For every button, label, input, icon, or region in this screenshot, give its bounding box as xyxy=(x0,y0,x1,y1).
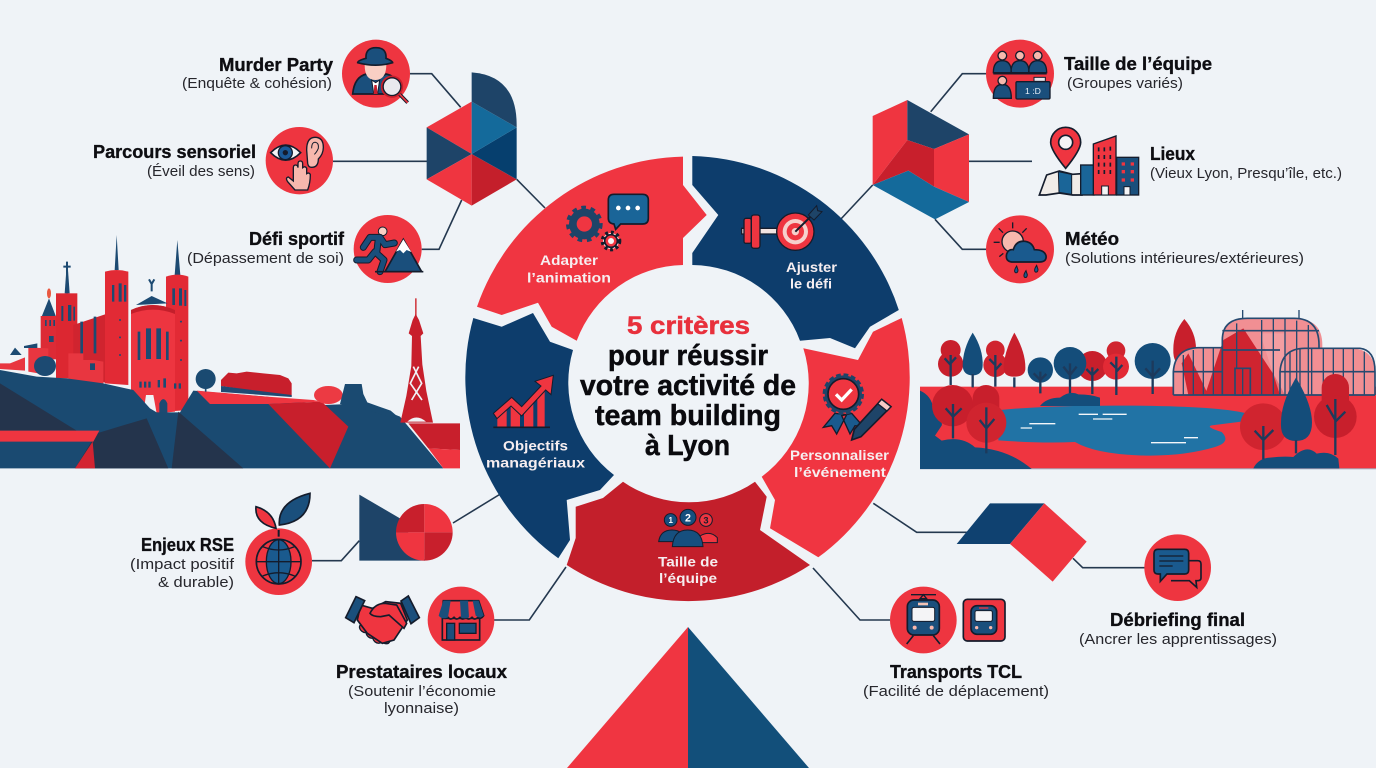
text: Défi sportif: Défi sportif xyxy=(249,229,345,249)
text: Transports TCL: Transports TCL xyxy=(890,662,1022,682)
label: Objectifs managériaux: Objectifs xyxy=(503,438,568,454)
text: Défi sportif xyxy=(187,229,345,267)
text: Enjeux RSE xyxy=(130,535,235,591)
label: Objectifs managériaux: managériaux xyxy=(486,454,585,470)
label: Ajuster le défi: le défi xyxy=(790,276,832,292)
label: Personnaliser l'événement: Personnaliser xyxy=(790,447,890,463)
icon: dumbbell and target xyxy=(742,206,822,250)
item: Enjeux RSE xyxy=(130,493,312,595)
text: Débriefing final xyxy=(1079,610,1277,648)
icon: gears and speech bubble xyxy=(569,194,648,249)
text: Lieux: Lieux xyxy=(1150,144,1195,164)
item: Taille de l'équipe xyxy=(986,40,1212,108)
text: Enjeux RSE: Enjeux RSE xyxy=(141,535,234,555)
central title xyxy=(580,312,796,462)
ground xyxy=(920,387,1376,469)
label: Personnaliser l'événement xyxy=(790,447,890,480)
basilica xyxy=(0,235,188,413)
segment: Ajuster le défi xyxy=(692,156,899,348)
cluster bottom left xyxy=(359,495,453,561)
icon: handshake xyxy=(346,596,419,645)
hexagon cluster top left xyxy=(427,72,517,206)
icon: detective xyxy=(342,40,410,108)
icon: three numbered people xyxy=(659,509,717,547)
icon: tram xyxy=(890,587,957,653)
text: Prestataires locaux: Prestataires locaux xyxy=(336,662,507,682)
item: Parcours sensoriel xyxy=(93,127,333,194)
hexagon cluster top right xyxy=(873,100,969,219)
text: Transports TCL xyxy=(863,662,1049,700)
label: Taille de l'équipe: l’équipe xyxy=(659,570,717,586)
text: Taille de l'équipe: Taille de l’équipe xyxy=(1064,54,1212,74)
label: Adapter l'animation xyxy=(527,252,611,286)
central title: 5 critères xyxy=(627,312,750,340)
icon: three numbered people: 2 xyxy=(685,512,691,524)
label: Taille de l'équipe xyxy=(658,554,718,586)
label: Objectifs managériaux xyxy=(486,438,585,470)
icon: badge and pencil xyxy=(823,375,891,440)
label: Ajuster le défi: Ajuster xyxy=(786,259,838,275)
text: Lieux xyxy=(1150,144,1342,182)
label: Ajuster le défi xyxy=(786,259,838,292)
back row trees xyxy=(938,319,1196,395)
text: Parcours sensoriel xyxy=(93,142,256,180)
segment: Taille de l'équipe xyxy=(567,482,810,601)
icon: eye, ear and hand xyxy=(266,127,333,194)
icon: globe and leaves xyxy=(245,493,312,595)
icon: speech bubbles xyxy=(1144,534,1211,601)
text: Prestataires locaux: (Soutenir l’économie xyxy=(348,683,496,700)
segment: Personnaliser l'événement xyxy=(762,318,910,557)
right illustration: Parc de la Tête d'Or xyxy=(920,310,1376,469)
label: Adapter l'animation: l’animation xyxy=(527,270,611,286)
item: Débriefing final xyxy=(1079,534,1277,648)
text: Débriefing final: Débriefing final xyxy=(1110,610,1245,630)
text: Transports TCL: (Facilité de déplacement) xyxy=(863,683,1049,700)
item: Transports TCL xyxy=(863,587,1049,700)
central title: team building xyxy=(595,400,781,432)
central ring xyxy=(465,156,910,601)
connector lines xyxy=(312,74,1146,620)
item: Défi sportif xyxy=(187,215,423,283)
item: Lieux xyxy=(1039,127,1342,195)
lake xyxy=(998,406,1246,456)
text: Parcours sensoriel: (Éveil des sens) xyxy=(147,163,255,180)
icon: three numbered people: 3 xyxy=(703,516,709,526)
bottom decorative triangle xyxy=(567,627,809,768)
icon: local shop xyxy=(428,587,494,653)
label: Taille de l'équipe: Taille de xyxy=(658,554,718,570)
central title: votre activité de xyxy=(580,370,796,402)
greenhouse xyxy=(1173,310,1375,395)
left illustration: Fourvière skyline of Lyon xyxy=(0,235,460,468)
label: Personnaliser l'événement: l’événement xyxy=(794,464,886,480)
icon: metro sign xyxy=(963,599,1005,641)
central title: à Lyon xyxy=(645,430,730,462)
text: Parcours sensoriel: Parcours sensoriel xyxy=(93,142,256,162)
text: Défi sportif: (Dépassement de soi) xyxy=(187,250,344,267)
text: Taille de l'équipe xyxy=(1064,54,1212,92)
text: Murder Party xyxy=(182,55,333,92)
text: Enjeux RSE: (Impact positif xyxy=(130,556,235,573)
text: Taille de l'équipe: (Groupes variés) xyxy=(1067,75,1183,92)
label: Adapter l'animation: Adapter xyxy=(540,252,599,268)
icon: runner and mountain xyxy=(354,215,423,283)
item: Météo xyxy=(986,215,1304,283)
central title: pour réussir xyxy=(608,340,768,372)
segment: Objectifs managériaux xyxy=(465,313,614,558)
text: Enjeux RSE: & durable) xyxy=(158,574,234,591)
text: Prestataires locaux xyxy=(336,662,507,717)
item: Prestataires locaux xyxy=(336,587,507,717)
icon: sun, cloud and rain xyxy=(986,215,1054,283)
text: Murder Party: (Enquête & cohésion) xyxy=(182,75,332,92)
text: Débriefing final: (Ancrer les apprentissages) xyxy=(1079,631,1277,648)
icon: growth chart xyxy=(493,375,553,427)
text: Météo: Météo xyxy=(1065,229,1119,249)
text: Prestataires locaux: lyonnaise) xyxy=(384,700,459,717)
Fourvière metallic tower xyxy=(400,298,433,423)
icon: team and clock: 1 :D xyxy=(1025,86,1041,96)
hill xyxy=(0,370,443,468)
text: Météo: (Solutions intérieures/extérieures) xyxy=(1065,250,1304,267)
icon: three numbered people: 1 xyxy=(668,516,673,525)
cluster bottom right xyxy=(957,503,1087,582)
icon: team and clock xyxy=(986,40,1054,108)
foreground trees and bushes xyxy=(920,374,1357,469)
segment: Adapter l'animation xyxy=(477,157,707,341)
text: Météo xyxy=(1065,229,1304,267)
text: Lieux: (Vieux Lyon, Presqu’île, etc.) xyxy=(1150,165,1342,182)
item: Murder Party xyxy=(182,40,410,108)
text: Murder Party: Murder Party xyxy=(219,55,333,75)
icon: map, pin and buildings xyxy=(1039,127,1139,195)
